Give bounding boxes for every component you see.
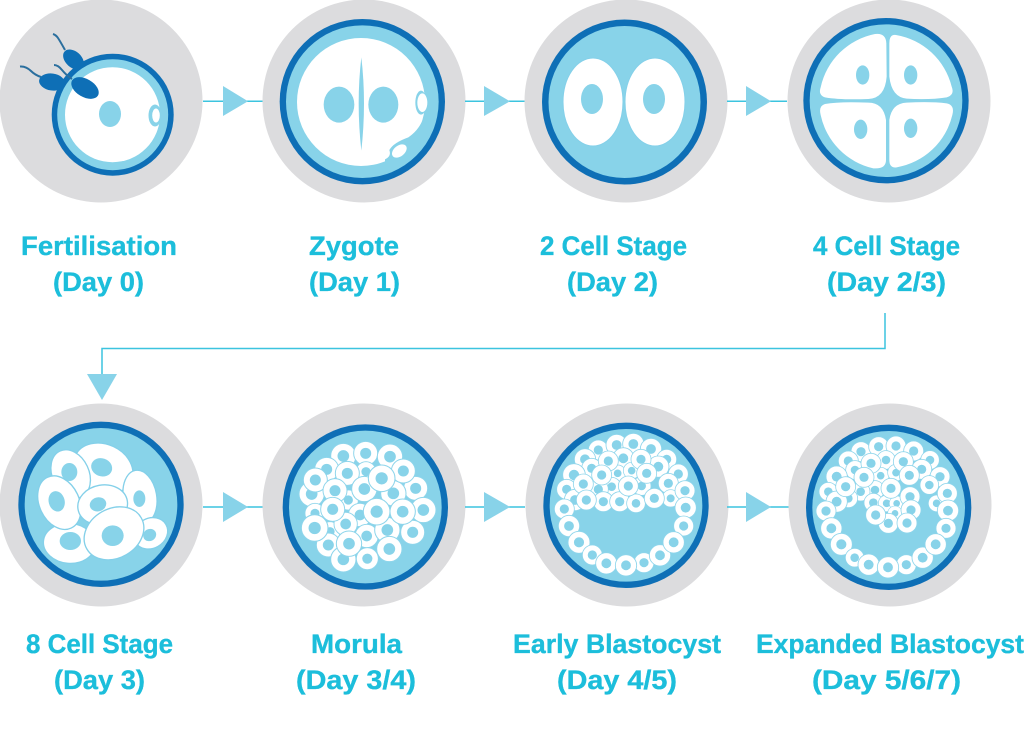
inner cell mass — [816, 436, 950, 533]
cell bottom right — [889, 102, 953, 167]
panel: 4 cell stage — [788, 0, 990, 202]
label: 2 Cell Stage: (Day 2) — [567, 267, 658, 297]
cell left — [563, 58, 623, 146]
label: Early Blastocyst — [513, 629, 721, 695]
egg cell — [65, 67, 160, 162]
panel: fertilisation stage — [0, 0, 202, 202]
label: 4 Cell Stage: (Day 2/3) — [827, 267, 946, 297]
label: Fertilisation: (Day 0) — [53, 267, 144, 297]
polar body lower — [385, 117, 427, 168]
label: Zygote: (Day 1) — [309, 267, 400, 297]
cell top left — [820, 34, 887, 99]
label: Early Blastocyst: Early Blastocyst — [513, 629, 721, 659]
central sliver — [359, 57, 364, 151]
panel: expanded blastocyst stage — [788, 404, 992, 606]
nuclei — [854, 65, 917, 139]
label: Zygote: Zygote — [309, 231, 399, 261]
pronucleus right — [368, 87, 398, 123]
nucleus left — [581, 84, 603, 114]
panel: zygote stage — [262, 0, 466, 202]
label: Morula — [296, 629, 416, 695]
cluster of eight cells — [29, 434, 173, 570]
label: Fertilisation: Fertilisation — [21, 231, 177, 261]
label: Expanded Blastocyst — [756, 629, 1024, 695]
arrow: 8 cell to morula — [203, 492, 263, 522]
label: Morula: (Day 3/4) — [296, 665, 416, 695]
outer ring of cells — [558, 481, 696, 576]
polar body upper — [415, 91, 427, 115]
label: Expanded Blastocyst: Expanded Blastocyst — [756, 629, 1024, 659]
inner cell mass — [554, 433, 688, 519]
panel: morula stage — [262, 404, 466, 606]
icon: sperm cells — [20, 34, 102, 103]
cell right — [625, 58, 685, 146]
nucleus — [99, 101, 121, 127]
arrow: connector from row one to row two — [87, 313, 885, 400]
label: 4 Cell Stage — [813, 231, 960, 297]
label: 8 Cell Stage: (Day 3) — [54, 665, 145, 695]
label: Morula: Morula — [311, 629, 403, 659]
pronucleus left — [324, 87, 354, 123]
arrow: zygote to 2 cell — [465, 86, 525, 116]
arrow: 2 cell to 4 cell — [727, 86, 787, 116]
label: 8 Cell Stage: 8 Cell Stage — [26, 629, 173, 659]
panel: 8 cell stage — [0, 404, 202, 606]
cell bottom left — [820, 102, 886, 168]
outer ring of cells — [821, 483, 959, 578]
cell cluster — [299, 441, 436, 572]
arrow: early to expanded blastocyst — [727, 492, 790, 522]
label: 4 Cell Stage: 4 Cell Stage — [813, 231, 960, 261]
cell top right — [889, 35, 953, 99]
label: 2 Cell Stage — [540, 231, 687, 297]
zygote cell — [297, 38, 425, 166]
panel: early blastocyst stage — [526, 404, 728, 606]
arrow: fertilisation to zygote — [203, 86, 263, 116]
nucleus right — [643, 84, 665, 114]
label: Expanded Blastocyst: (Day 5/6/7) — [812, 665, 961, 695]
arrow: morula to early blastocyst — [465, 492, 525, 522]
panel: 2 cell stage — [524, 0, 728, 202]
polar body — [148, 104, 162, 126]
label: Early Blastocyst: (Day 4/5) — [557, 665, 677, 695]
label: 8 Cell Stage — [26, 629, 173, 695]
label: 2 Cell Stage: 2 Cell Stage — [540, 231, 687, 261]
label: Fertilisation — [21, 231, 177, 297]
label: Zygote — [309, 231, 400, 297]
